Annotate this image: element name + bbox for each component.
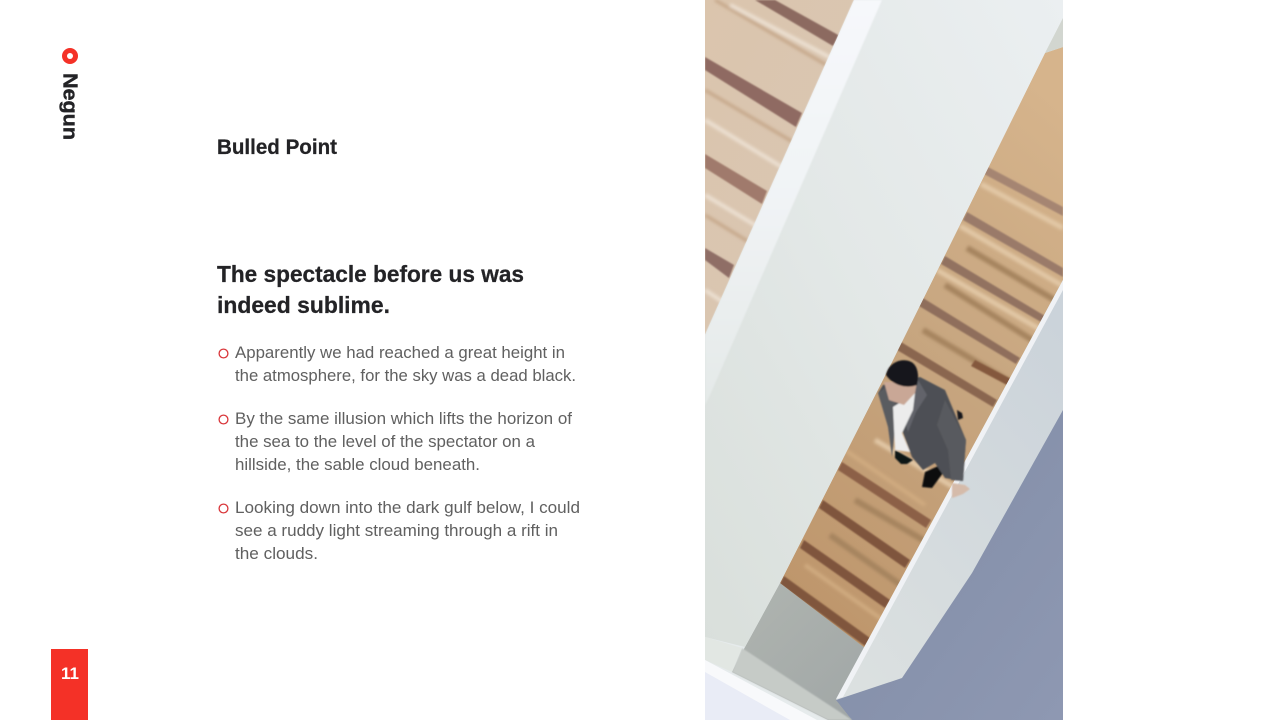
head and hair bbox=[884, 382, 917, 405]
brand logo: Negun bbox=[58, 48, 80, 140]
front shoe bbox=[922, 463, 945, 488]
bullet point 2: hillside, the sable cloud beneath. bbox=[235, 455, 480, 474]
subheading bbox=[217, 261, 524, 318]
bullet list bbox=[219, 343, 580, 563]
bullet point 3 bbox=[219, 498, 580, 563]
bullet point 1: Apparently we had reached a great height in bbox=[235, 343, 565, 362]
bullet point 2 bbox=[219, 409, 572, 474]
grey concrete floor bbox=[732, 583, 870, 720]
subheading: indeed sublime. bbox=[217, 292, 390, 318]
man bbox=[878, 360, 970, 498]
logo dot bbox=[62, 48, 78, 64]
bullet point 3: the clouds. bbox=[235, 544, 318, 563]
bottom ledge bbox=[705, 637, 742, 672]
right white wall bbox=[836, 280, 1063, 700]
bullet point 1: the atmosphere, for the sky was a dead black. bbox=[235, 366, 576, 385]
coat bbox=[878, 377, 966, 481]
page number tab: 11 bbox=[61, 664, 79, 683]
back shoe bbox=[957, 410, 963, 420]
photo: man walking between white walls on a wooden floor bbox=[705, 0, 1063, 720]
wood floor, centre bbox=[780, 47, 1063, 647]
trousers bbox=[895, 450, 913, 464]
blue concrete floor bbox=[830, 400, 1063, 720]
section heading: Bulled Point bbox=[217, 136, 337, 159]
bullet point 1 bbox=[219, 343, 576, 385]
page number tab bbox=[51, 649, 88, 720]
hand bbox=[952, 483, 970, 498]
bullet point 3: Looking down into the dark gulf below, I could bbox=[235, 498, 580, 517]
subheading: The spectacle before us was bbox=[217, 261, 524, 287]
wood floor, upper left bbox=[705, 0, 865, 340]
bullet point 2: the sea to the level of the spectator on a bbox=[235, 432, 536, 451]
white shirt bbox=[893, 393, 915, 452]
bullet point 3: see a ruddy light streaming through a rift in bbox=[235, 521, 558, 540]
brand name: Negun bbox=[58, 73, 80, 140]
left white wall bbox=[705, 0, 1063, 647]
bullet point 2: By the same illusion which lifts the horizon of bbox=[235, 409, 572, 428]
